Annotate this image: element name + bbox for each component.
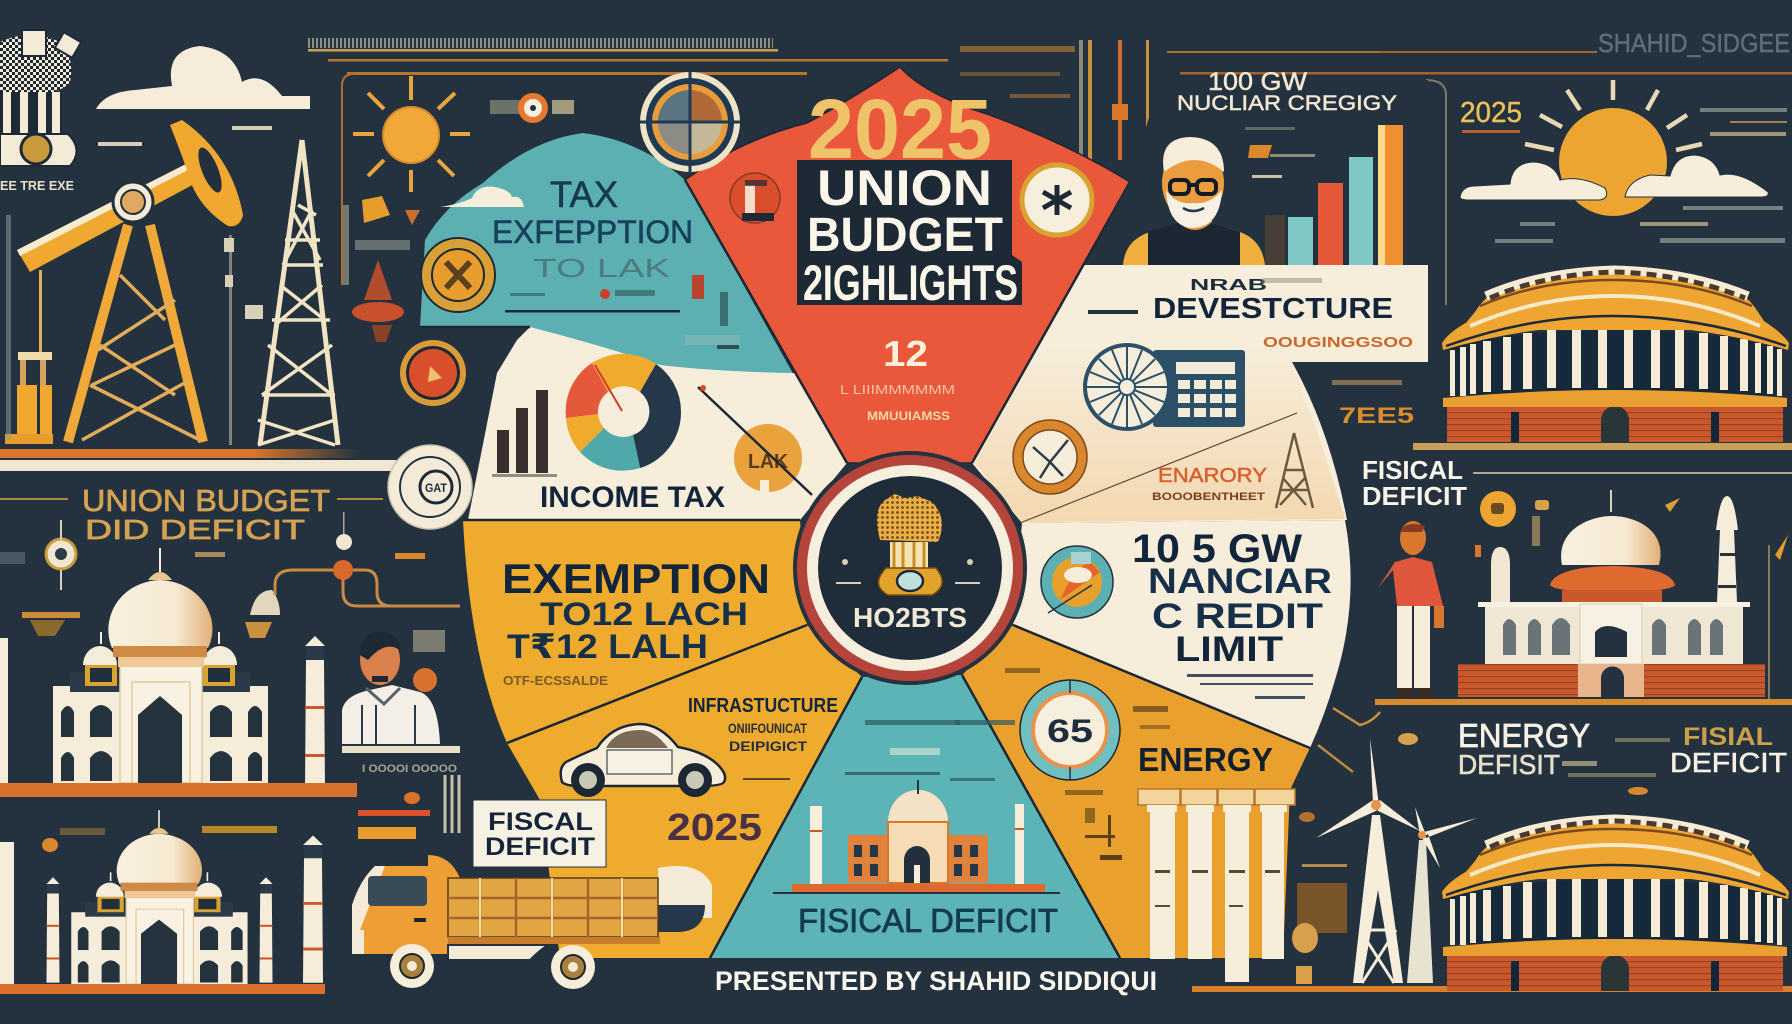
center medallion: HO2BTS: [853, 602, 967, 633]
floor: upper-left: [0, 449, 398, 471]
nuclear energy heading: [1177, 68, 1397, 115]
bar chart: nuclear energy: [1265, 125, 1403, 265]
energy subhead in divestiture wedge: BOOOBENTHEET: [1152, 491, 1265, 503]
left fine print and stripes: [358, 763, 459, 839]
energy subhead in divestiture wedge: ENARORY: [1158, 465, 1267, 487]
wind turbines: [1316, 738, 1477, 983]
peach shading in divestiture wedge: [975, 345, 1345, 522]
icon: monument on teal: [773, 780, 1060, 894]
energy gauge 65: 65: [1047, 713, 1093, 749]
floor: lower-left: [0, 984, 325, 994]
icon: national emblem: [877, 494, 942, 595]
wedge divider lines: [420, 180, 1310, 958]
emblem: top-left: [0, 30, 81, 193]
icon: gold coin badge: [1022, 165, 1092, 235]
infrastructure heading: INFRASTUCTURE: [688, 695, 838, 717]
nuclear energy heading: NUCLIAR CREGIGY: [1177, 92, 1397, 115]
red wedge stat: 12: 12: [883, 333, 928, 374]
panel: credit limit cream wedge: [1013, 520, 1351, 748]
fisical deficit label: [1362, 455, 1792, 511]
red wedge stat: 12: L LIIIMMMMMM: [840, 382, 955, 397]
minister portrait: [1123, 137, 1265, 265]
year 2025 on yellow: 2025: [667, 807, 762, 849]
title box: union budget highlights: 2IGHLIGHTS: [803, 255, 1018, 311]
oil pump jack: [5, 120, 272, 444]
navy inset notes: 2025: [1332, 380, 1414, 428]
icon: red wedge badge: [730, 173, 780, 223]
exemption to 12 lakh heading: T₹12 LALH: [507, 628, 708, 666]
fisical deficit label: FISICAL: [1362, 455, 1463, 485]
navy inset notes: 2025: 7EE5: [1339, 403, 1414, 428]
left heading: union budget did deficit: [0, 483, 383, 545]
pipe connector: [275, 570, 460, 606]
panel: tax exemption teal wedge: [420, 133, 805, 395]
exemption to 12 lakh heading: OTF-ECSSALDE: [503, 673, 608, 688]
infrastructure heading: DEIPIGICT: [729, 738, 807, 754]
fiscal deficit placard: FISCAL: [488, 808, 593, 836]
chart: income tax donut: [566, 354, 681, 471]
red wedge stat: 12: [840, 333, 955, 423]
energy gauge 65: [1020, 680, 1120, 780]
colonnade: [1138, 789, 1295, 982]
minarets: upper-left row: [0, 636, 325, 791]
left heading: union budget did deficit: UNION BUDGET: [82, 483, 330, 518]
emblem: top-left: EE TRE EXE: [0, 178, 74, 193]
icon: lakh coin with pointer: LAK: [748, 451, 789, 473]
nuclear energy heading: 100 GW: [1208, 68, 1307, 96]
credit limit heading: LIMIT: [1175, 630, 1283, 669]
tax exemption heading: [492, 174, 693, 283]
credit limit chart icon: [1041, 546, 1113, 618]
sun: top-left: [353, 76, 470, 192]
exemption to 12 lakh heading: TO12 LACH: [540, 596, 748, 632]
credit limit heading: C REDIT: [1152, 597, 1323, 636]
teal wedge small notes: [505, 275, 740, 349]
monument: lower-left: [71, 810, 248, 984]
energy wedge small notes: [1005, 668, 1170, 860]
exemption to 12 lakh heading: [502, 555, 770, 688]
floor: mid-left: [0, 783, 357, 797]
panel: union budget red wedge: [685, 67, 1130, 463]
person: left: [342, 630, 460, 753]
floor: upper-right: [1413, 443, 1792, 450]
panel: infrastructure yellow wedge: [507, 625, 862, 958]
sun with clouds: top-right: [1460, 80, 1768, 216]
energy subhead in divestiture wedge: [1152, 465, 1267, 503]
icon: small tower: [1276, 433, 1313, 508]
year 2025: top-right: 2025: [1460, 97, 1522, 129]
icon: cracked orange badge: [1013, 420, 1087, 494]
divestiture heading: [1088, 277, 1413, 351]
target badge: [490, 93, 574, 123]
icon: tax badge: [421, 238, 495, 312]
energy deficit labels: FISIAL: [1683, 723, 1773, 751]
tax exemption heading: TAX: [550, 174, 618, 215]
top decorative rules: [308, 38, 1792, 305]
minarets: lower-left row: [0, 836, 323, 984]
icon: car: [561, 724, 725, 797]
divestiture heading: NRAB: [1190, 277, 1267, 294]
icon: lakh coin with pointer: [698, 385, 812, 495]
energy deficit labels: [1458, 717, 1787, 780]
left ornaments: [0, 520, 425, 638]
person: right: [1378, 521, 1444, 698]
center medallion: [793, 451, 1027, 685]
right decorative props: [1292, 708, 1648, 984]
red wedge stat: 12: MMUUIAMSS: [867, 409, 950, 423]
node icons on pipe: [333, 512, 353, 580]
cloud: top-left: [96, 46, 310, 109]
presenter credit: PRESENTED BY SHAHID SIDDIQUI: [715, 966, 1157, 996]
icon: calculator: [1153, 350, 1245, 427]
title box: union budget highlights: [797, 160, 1022, 311]
panel: income tax cream wedge: [468, 327, 847, 520]
monument: upper-right: [1458, 490, 1788, 700]
small notes beside chart: [1245, 127, 1315, 178]
circle badge and small icons: [1475, 491, 1680, 557]
icon: red badge: [400, 340, 466, 406]
portrait backdrop navy: [1085, 80, 1428, 265]
energy deficit labels: DEFICIT: [1670, 747, 1787, 778]
icon: pie clock badge: [640, 72, 740, 172]
truck: [352, 855, 712, 989]
teal wedge fine print: [845, 720, 1015, 781]
panel: fiscal deficit teal wedge: [710, 675, 1120, 958]
income tax heading: INCOME TAX: [540, 481, 725, 514]
exemption to 12 lakh heading: EXEMPTION: [502, 555, 770, 602]
icon: white seal badge: GAT: [425, 481, 448, 495]
left fine print and stripes: I OOOOI OOOOO: [362, 763, 457, 775]
panel: exemption yellow wedge: [463, 520, 807, 743]
fiscal deficit heading on teal: FISICAL DEFICIT: [798, 902, 1058, 939]
lower-left small notes: [42, 826, 277, 852]
top-right faint notes: [1495, 108, 1787, 243]
mini icons between derrick and wheel: [224, 196, 420, 445]
fiscal deficit placard: DEFICIT: [485, 833, 595, 861]
tax exemption heading: EXFEPPTION: [492, 214, 693, 250]
icon: ashoka wheel: [1085, 345, 1169, 429]
icon: white seal badge: [388, 445, 472, 529]
monument: large left: [53, 548, 268, 783]
fisical deficit label: DEFICIT: [1362, 481, 1467, 511]
energy heading: ENERGY: [1138, 741, 1273, 778]
energy deficit labels: ENERGY: [1458, 717, 1590, 754]
title box: union budget highlights: UNION: [817, 160, 992, 216]
derrick tower: [258, 140, 338, 445]
chart: income tax bars: [492, 390, 557, 477]
title year 2025: 2025: [808, 82, 992, 176]
divestiture heading: OOUGINGGSOO: [1263, 334, 1413, 351]
fiscal deficit placard: [473, 800, 606, 867]
divestiture heading: DEVESTCTURE: [1153, 293, 1393, 325]
parliament: lower-right: [1442, 816, 1789, 991]
credit limit heading: 10 5 GW: [1132, 527, 1302, 571]
floor: mid-right: [1375, 699, 1792, 705]
floor: lower-right: [1192, 986, 1792, 992]
panel: energy orange wedge: [962, 625, 1310, 958]
credit limit heading: [1132, 527, 1332, 699]
panel: divestiture cream wedge: [972, 265, 1428, 523]
cloud: teal wedge: [440, 186, 524, 207]
tax exemption heading: TO LAK: [533, 253, 671, 283]
infrastructure heading: [688, 695, 838, 780]
left heading: union budget did deficit: DID DEFICIT: [85, 514, 305, 545]
infrastructure heading: ONIIFOUNICAT: [728, 720, 807, 736]
credit limit heading: NANCIAR: [1148, 562, 1332, 601]
energy deficit labels: DEFISIT: [1458, 749, 1560, 780]
parliament: upper-right: [1442, 267, 1789, 442]
title box: union budget highlights: BUDGET: [807, 209, 1003, 262]
